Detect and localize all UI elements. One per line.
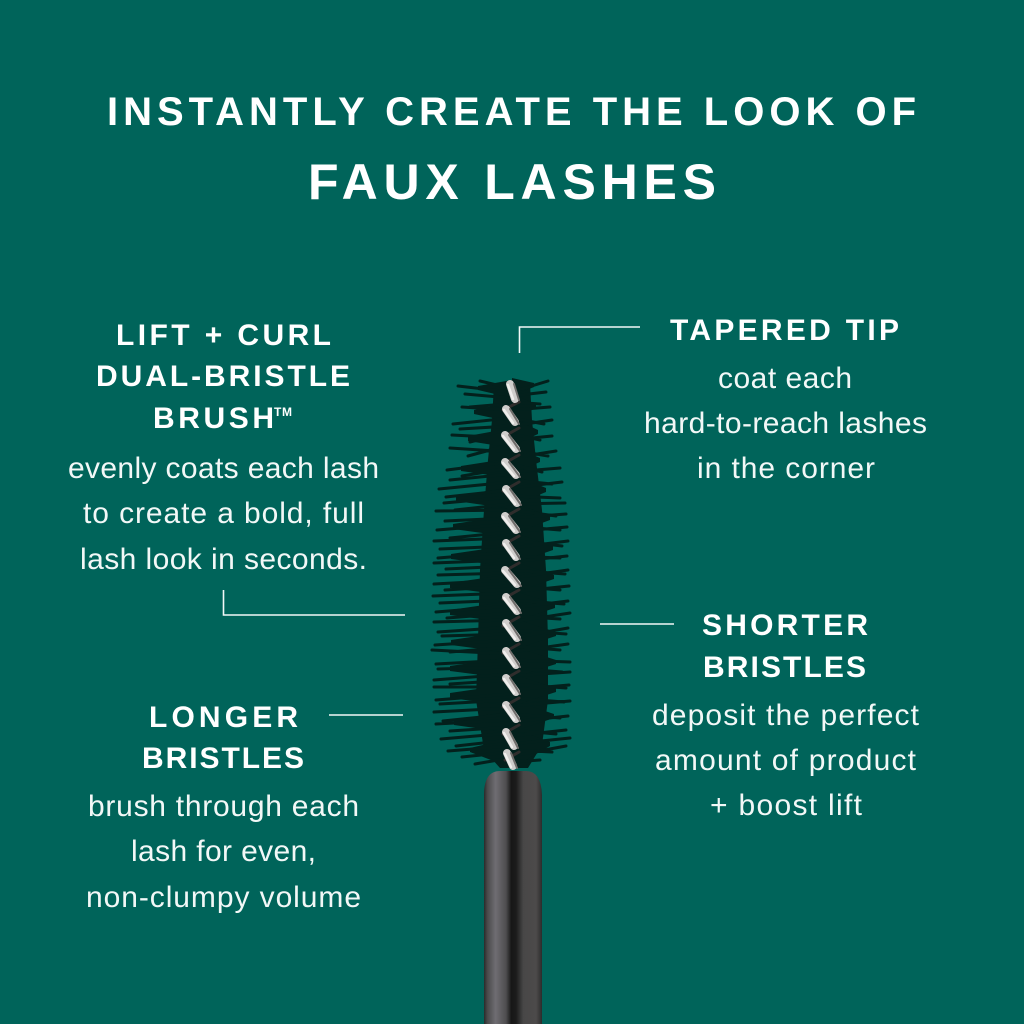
text: brush description: lash look in seconds. <box>80 543 367 576</box>
text: brush description <box>68 452 379 576</box>
heading: lift + curl dual-bristle brush: BRUSH <box>153 402 274 435</box>
text: brush description: to create a bold, full <box>83 497 364 530</box>
text: tapered tip description <box>644 362 927 485</box>
heading: longer bristles <box>142 701 304 775</box>
panel: tapered tip <box>520 314 927 485</box>
text: brush description: evenly coats each lash <box>68 452 379 485</box>
heading: longer bristles: LONGER <box>149 701 298 734</box>
title: INSTANTLY CREATE THE LOOK OF <box>107 90 916 134</box>
heading: lift + curl dual-bristle brush: TM <box>274 405 292 419</box>
panel: shorter bristles <box>600 609 920 822</box>
title <box>107 90 916 210</box>
heading: tapered tip: TAPERED TIP <box>670 314 899 347</box>
text: tapered tip description: in the corner <box>697 452 875 485</box>
left bristles <box>432 381 510 764</box>
text: longer bristles description: lash for even, <box>131 835 316 868</box>
text: tapered tip description: coat each <box>718 362 852 395</box>
text: longer bristles description: non-clumpy volume <box>86 881 361 914</box>
mascara brush <box>432 378 570 768</box>
mascara wand handle <box>484 771 542 1024</box>
text: shorter bristles description <box>652 699 920 822</box>
right bristles <box>512 381 570 762</box>
right bristle clusters <box>512 378 556 768</box>
leader line: shorter bristles <box>600 623 674 625</box>
heading: longer bristles: BRISTLES <box>142 742 304 775</box>
twisted silver wire <box>503 384 521 768</box>
text: shorter bristles description: amount of product <box>655 744 917 777</box>
text: shorter bristles description: deposit the perfect <box>652 699 920 732</box>
text: longer bristles description: brush through each <box>88 790 359 823</box>
heading: lift + curl dual-bristle brush: LIFT + CURL <box>116 319 331 352</box>
text: longer bristles description <box>86 790 361 914</box>
panel: longer bristles <box>86 701 403 914</box>
title: FAUX LASHES <box>308 154 716 210</box>
heading: lift + curl dual-bristle brush: DUAL-BRISTLE <box>96 360 350 393</box>
panel: lift and curl brush <box>68 319 405 615</box>
heading: shorter bristles <box>702 609 868 684</box>
text: tapered tip description: hard-to-reach lashes <box>644 407 927 440</box>
left bristle clusters <box>450 380 512 768</box>
leader line: tapered tip <box>520 327 640 353</box>
leader line: brush <box>224 590 405 615</box>
heading: shorter bristles: BRISTLES <box>703 651 866 684</box>
brush dense centre <box>476 384 548 768</box>
heading: shorter bristles: SHORTER <box>702 609 868 642</box>
leader line: longer bristles <box>329 714 403 716</box>
text: shorter bristles description: + boost lift <box>710 789 863 822</box>
heading: lift + curl dual-bristle brush <box>96 319 350 435</box>
